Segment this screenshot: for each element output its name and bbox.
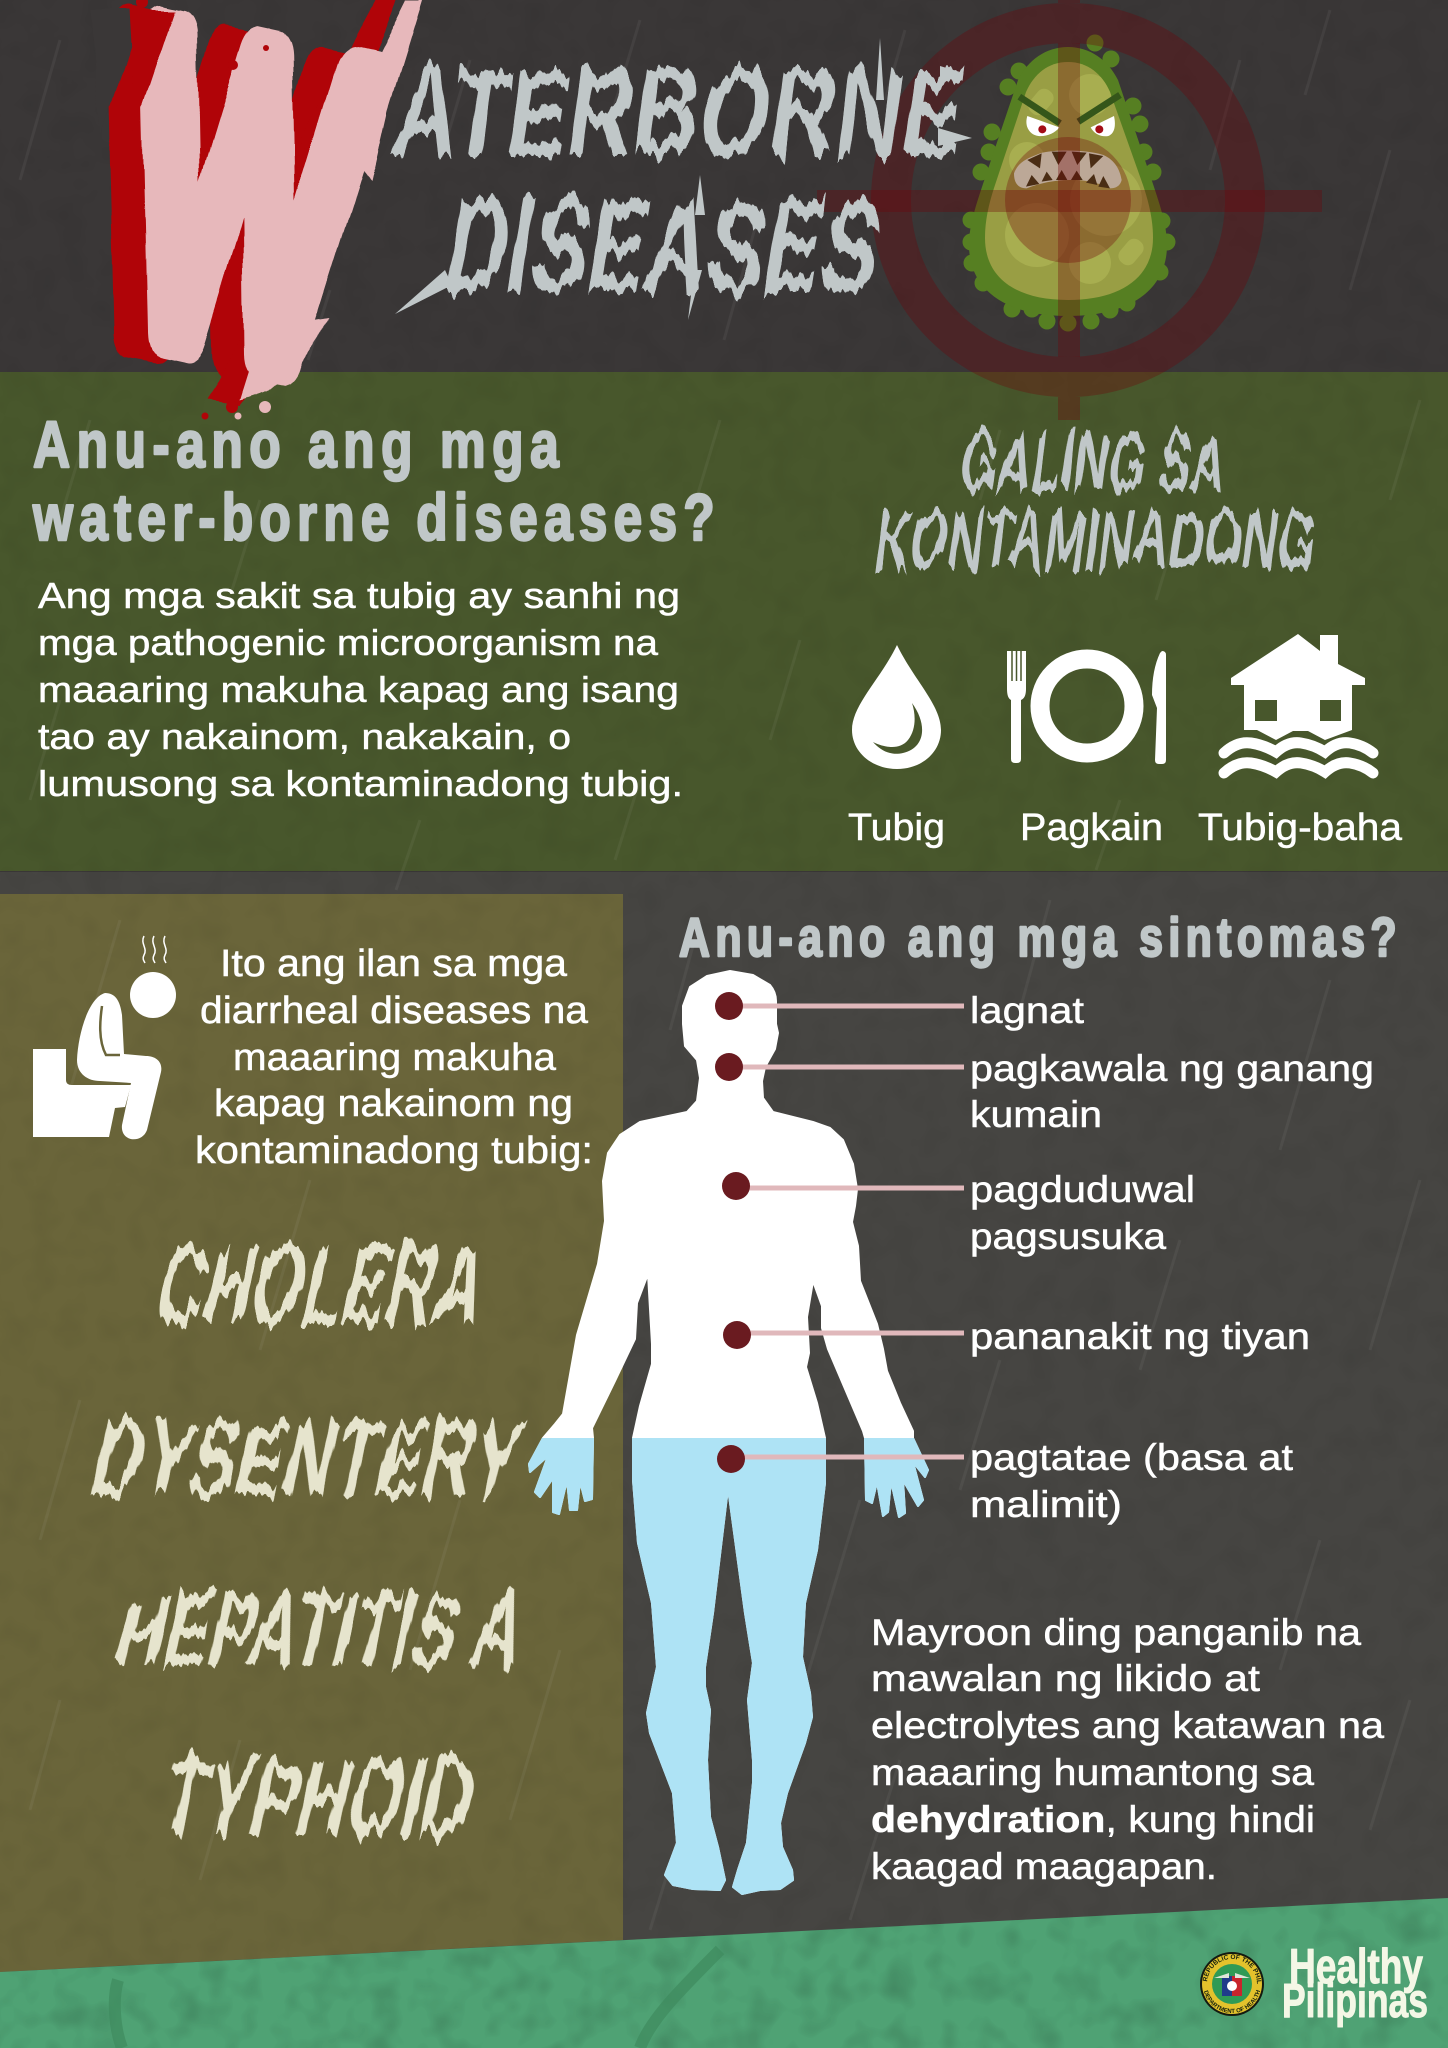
icon: flooded house: [1224, 634, 1373, 773]
heading: galing sa kontaminadong: [869, 416, 1322, 586]
text: definition paragraph: Ang mga sakit sa tubig ay sanhi ng: [38, 575, 680, 616]
paint splatter around W: [136, 0, 292, 420]
crosshair target: [817, 0, 1322, 420]
logo: department of health seal: REPUBLIC OF THE PHILIPPINES: [1202, 1954, 1262, 1984]
text: diarrheal diseases intro: maaaring makuha: [233, 1037, 557, 1079]
list: disease names: DYSENTERY: [80, 1401, 534, 1518]
panel: green definition band: [0, 372, 1448, 871]
text: diarrheal diseases intro: kontaminadong tubig:: [195, 1130, 593, 1172]
title: aterborne diseases: ATERBORNE: [384, 45, 974, 181]
icon labels: Tubig-baha: [1198, 807, 1403, 849]
text: definition paragraph: lumusong sa kontaminadong tubig.: [38, 763, 683, 804]
icon labels: Pagkain: [1020, 807, 1163, 849]
list: disease names: HEPATITIS A: [104, 1571, 538, 1688]
heading: galing sa kontaminadong: GALING SA: [954, 416, 1232, 508]
text: diarrheal diseases intro: [195, 943, 593, 1172]
heading: what are waterborne diseases: water-borne diseases?: [32, 480, 715, 554]
symptom labels: pagsusuka: [970, 1216, 1166, 1257]
icon labels: Tubig: [848, 807, 945, 849]
panel: green footer band: [0, 1898, 1448, 2048]
symptom labels: kumain: [970, 1094, 1102, 1135]
text: dehydration warning: mawalan ng likido at: [871, 1658, 1261, 1699]
text: definition paragraph: maaaring makuha kapag ang isang: [38, 669, 679, 710]
text: dehydration warning: [871, 1612, 1384, 1887]
title: aterborne diseases: DISEASES: [435, 173, 893, 320]
symptom labels: [970, 990, 1374, 1525]
symptom labels: malimit): [970, 1484, 1122, 1525]
symptom pointers: [715, 992, 964, 1473]
text: dehydration warning: kaagad maagapan.: [871, 1846, 1217, 1887]
list: disease names: [80, 1224, 538, 1859]
text: diarrheal diseases intro: kapag nakainom ng: [214, 1083, 573, 1125]
logo: department of health seal: DEPARTMENT OF HEALTH: [1204, 1990, 1260, 2013]
illustration: angry germ: [962, 34, 1176, 332]
panel: olive diarrheal diseases: [0, 894, 623, 1972]
text: dehydration warning: Mayroon ding panganib na: [871, 1612, 1361, 1653]
icon: person on toilet: [33, 936, 176, 1139]
heading: what are waterborne diseases: Anu-ano ang mga: [33, 407, 560, 481]
logo: healthy pilipinas: [1282, 1940, 1428, 2028]
icon labels: [848, 807, 1403, 849]
heading: symptoms: Anu-ano ang mga sintomas?: [679, 907, 1397, 968]
text: diarrheal diseases intro: diarrheal diseases na: [200, 990, 589, 1032]
text: dehydration warning: maaaring humantong sa: [871, 1752, 1314, 1793]
text: definition paragraph: mga pathogenic microorganism na: [38, 622, 659, 663]
title spikes: [395, 38, 972, 320]
body silhouette: [529, 971, 928, 1894]
symptom labels: lagnat: [970, 990, 1085, 1031]
list: disease names: CHOLERA: [144, 1224, 500, 1347]
text: dehydration warning: dehydration , kung hindi: [871, 1799, 1315, 1840]
heading: what are waterborne diseases: [32, 407, 715, 554]
symptom labels: pagduduwal: [970, 1169, 1195, 1210]
symptom labels: pagtatae (basa at: [970, 1437, 1294, 1478]
symptom labels: pananakit ng tiyan: [970, 1316, 1310, 1357]
list: disease names: TYPHOID: [149, 1738, 489, 1859]
text: definition paragraph: tao ay nakainom, nakakain, o: [38, 716, 571, 757]
text: dehydration warning: electrolytes ang katawan na: [871, 1705, 1384, 1746]
icon: plate and cutlery: [1007, 651, 1166, 764]
icon: water drop: [852, 645, 941, 769]
symptom labels: pagkawala ng ganang: [970, 1048, 1374, 1089]
title: aterborne diseases: [384, 45, 974, 320]
text: definition paragraph: [38, 575, 683, 804]
text: diarrheal diseases intro: Ito ang ilan sa mga: [220, 943, 568, 985]
